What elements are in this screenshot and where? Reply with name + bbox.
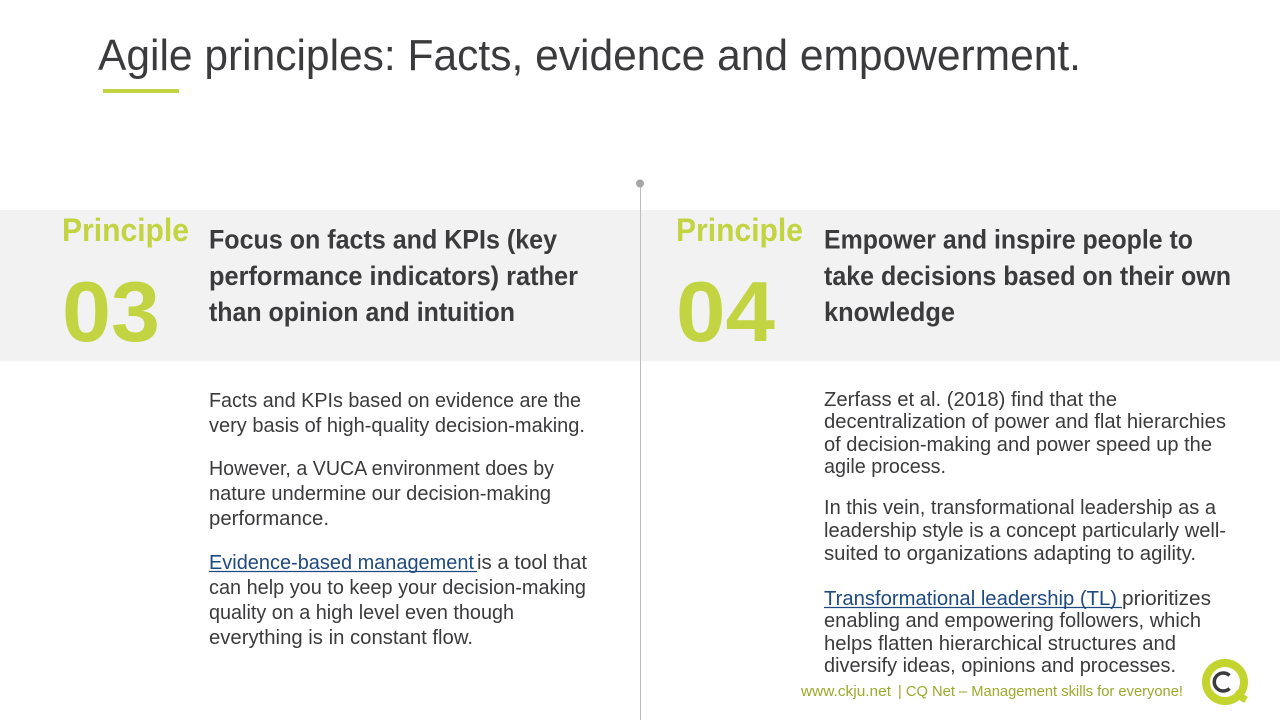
principle 03 body text: However, a VUCA environment does by — [209, 458, 554, 480]
principle 03 heading: than opinion and intuition — [209, 297, 515, 327]
principle 04 body text: agile process. — [824, 456, 946, 478]
principle 04 body text — [824, 389, 1226, 677]
principle 04 body text: helps flatten hierarchical structures and — [824, 633, 1176, 655]
panel: principle 03 — [62, 212, 587, 649]
principle 03 heading — [209, 224, 578, 327]
principle 03 heading: performance indicators) rather — [209, 261, 578, 291]
title accent underline — [103, 89, 179, 93]
icon: CQ logo — [1206, 663, 1246, 701]
principle 03 body text: everything is in constant flow. — [209, 627, 473, 649]
principle 03 body text: is a tool that — [477, 552, 587, 574]
principle 04 body text: diversify ideas, opinions and processes. — [824, 655, 1176, 677]
footer text: | CQ Net – Management skills for everyone! — [898, 684, 1183, 700]
principle 04 body text: of decision-making and power speed up the — [824, 434, 1212, 456]
principle 04 body text: suited to organizations adapting to agility. — [824, 543, 1196, 565]
principle 03 heading: Focus on facts and KPIs (key — [209, 224, 557, 254]
principle 03 body text: performance. — [209, 508, 329, 530]
center divider with dot — [636, 180, 644, 720]
principle 03 body text: very basis of high-quality decision-making. — [209, 415, 585, 437]
principle 04 label: Principle — [676, 212, 803, 248]
principle 03 number: 03 — [62, 265, 160, 360]
principle 04 body text: enabling and empowering followers, which — [824, 610, 1201, 632]
principle 03 body text — [209, 390, 587, 649]
principle 03 body text: Facts and KPIs based on evidence are the — [209, 390, 581, 412]
principle 03 body text: can help you to keep your decision-making — [209, 577, 586, 599]
principle 04 body text: decentralization of power and flat hierarchies — [824, 411, 1226, 433]
principle 03 body text: Evidence-based management — [209, 552, 474, 574]
title: Agile principles: Facts, evidence and empowerment. — [98, 31, 1081, 80]
principle 04 body text: leadership style is a concept particularly well- — [824, 520, 1226, 542]
principle 04 body text: Transformational leadership (TL) — [824, 588, 1117, 610]
principle 03 label: Principle — [62, 212, 189, 248]
header band — [0, 210, 1280, 361]
principle 04 heading: Empower and inspire people to — [824, 224, 1193, 254]
principle 04 number: 04 — [676, 265, 775, 360]
principle 04 heading — [824, 224, 1231, 327]
principle 04 body text: In this vein, transformational leadership as a — [824, 497, 1217, 519]
footer text: www.ckju.net — [800, 684, 891, 700]
principle 04 body text: prioritizes — [1122, 588, 1211, 610]
principle 03 body text: quality on a high level even though — [209, 602, 514, 624]
principle 04 heading: take decisions based on their own — [824, 261, 1231, 291]
panel: principle 04 — [676, 212, 1231, 677]
principle 03 body text: nature undermine our decision-making — [209, 483, 551, 505]
principle 04 body text: Zerfass et al. (2018) find that the — [824, 389, 1117, 411]
principle 04 heading: knowledge — [824, 297, 955, 327]
